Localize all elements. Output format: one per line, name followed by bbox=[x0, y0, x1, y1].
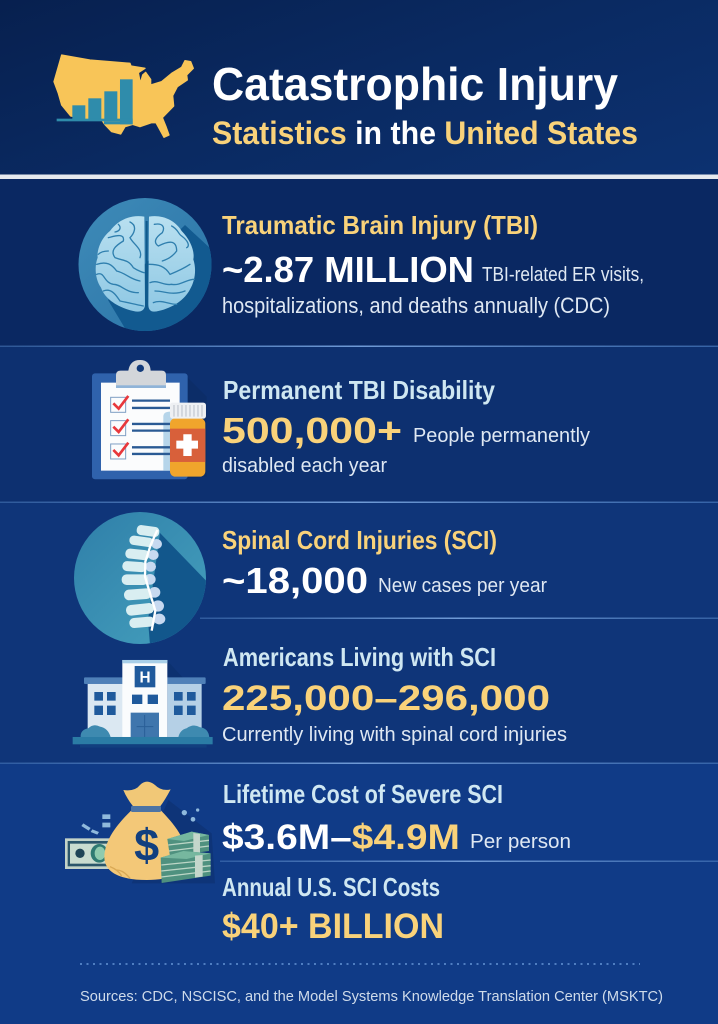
icon: money bag and cash: $ bbox=[134, 819, 159, 870]
description: new cases: New cases per year bbox=[378, 575, 547, 597]
heading: annual costs: Annual U.S. SCI Costs bbox=[222, 872, 440, 902]
sources: Sources: CDC, NSCISC, and the Model Systems Knowledge Translation Center (MSKTC) bbox=[80, 989, 663, 1005]
icon: clipboard and pill bottle bbox=[92, 360, 207, 479]
icon: money bag and cash bbox=[65, 782, 215, 883]
stat: 2.87 million: ~2.87 MILLION bbox=[222, 249, 474, 290]
description: hospitalizations: hospitalizations, and deaths annually (CDC) bbox=[222, 293, 610, 318]
section: lifetime cost text bbox=[222, 779, 571, 857]
section: annual costs text bbox=[222, 872, 444, 946]
icon: US map with bar chart bbox=[54, 55, 193, 137]
description: TBI visits: TBI-related ER visits, bbox=[482, 264, 644, 286]
section band: spinal bbox=[0, 503, 718, 763]
stat: 40 billion: $40+ BILLION bbox=[222, 907, 444, 946]
heading: lifetime cost: Lifetime Cost of Severe SCI bbox=[223, 779, 503, 809]
stat: 18,000: ~18,000 bbox=[222, 560, 368, 601]
section band: cost bbox=[0, 764, 718, 1024]
description: currently living: Currently living with spinal cord injuries bbox=[222, 724, 567, 746]
icon: hospital bbox=[73, 660, 213, 748]
section band: TBI bbox=[0, 179, 718, 346]
title line one: Catastrophic Injury bbox=[212, 58, 618, 110]
description: people: People permanently bbox=[413, 425, 590, 447]
section band: permanent disability bbox=[0, 347, 718, 502]
heading: spinal cord injuries: Spinal Cord Injuries (SCI) bbox=[222, 525, 497, 555]
stat: 500,000+: 500,000+ bbox=[222, 410, 402, 451]
section: Americans living text bbox=[222, 642, 567, 746]
title bbox=[212, 58, 638, 151]
heading: Americans living: Americans Living with SCI bbox=[223, 642, 496, 672]
icon: brain bbox=[78, 198, 212, 331]
section: permanent disability text bbox=[222, 375, 590, 477]
description: per person: Per person bbox=[470, 831, 571, 853]
title line two: Statistics in the United States bbox=[212, 115, 638, 151]
section: spinal cord text bbox=[222, 525, 547, 601]
heading: Traumatic Brain Injury: Traumatic Brain Injury (TBI) bbox=[222, 210, 538, 240]
stat: 225,000-296,000: 225,000–296,000 bbox=[222, 679, 550, 718]
icon: spine bbox=[74, 512, 206, 644]
section: TBI text bbox=[222, 210, 644, 318]
icon: hospital: H bbox=[139, 670, 151, 687]
stat: lifetime range: $3.6M– $4.9M bbox=[222, 818, 460, 857]
heading: permanent disability: Permanent TBI Disability bbox=[223, 375, 495, 405]
description: disabled: disabled each year bbox=[222, 455, 387, 477]
